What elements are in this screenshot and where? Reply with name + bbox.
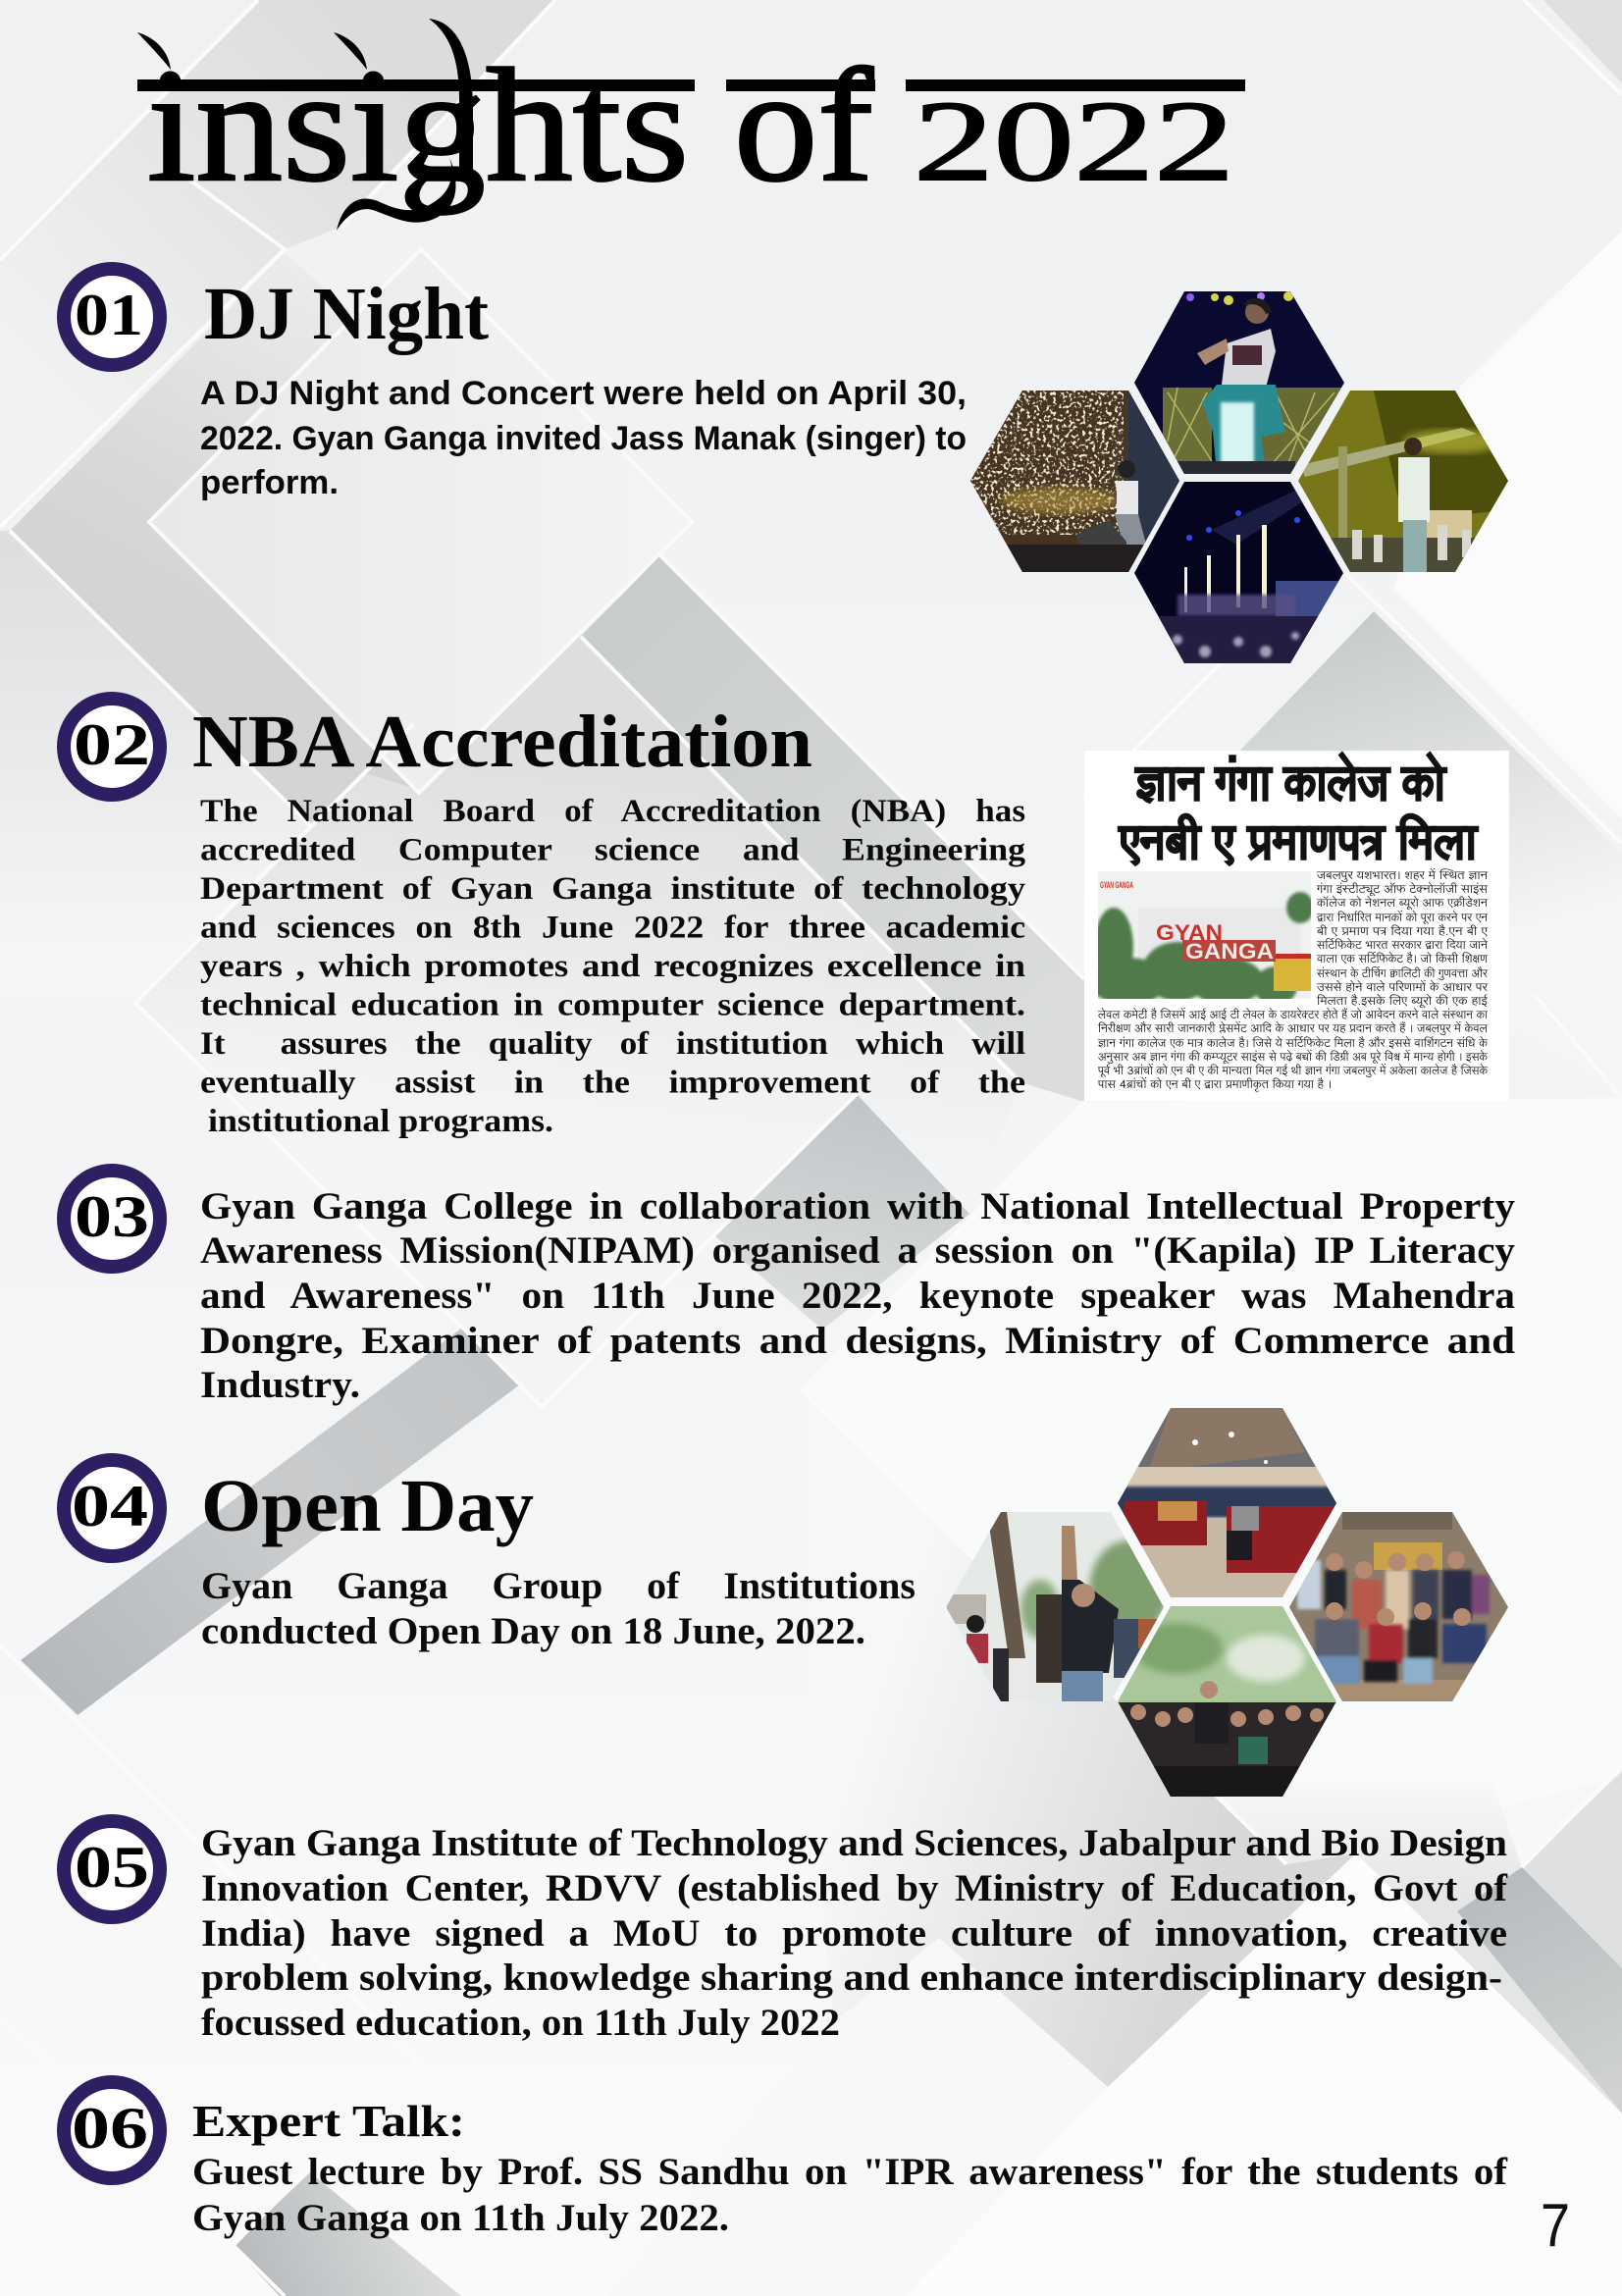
newspaper body text: जबलपुर यशभारत। शहर में स्थित ज्ञान (1316, 866, 1488, 885)
badge 02: 02 (74, 712, 150, 777)
title: of (734, 35, 873, 215)
newspaper photo: campus building: GYAN GANGA (1100, 880, 1133, 890)
badge 03: 03 (75, 1184, 149, 1249)
newspaper body text: संस्थान के टीचिंग क्वालिटी की गुणवत्ता और (1316, 965, 1489, 983)
text block: IP literacy description (200, 1185, 1516, 1406)
newspaper body text: पास 4ब्रांचों को एन बी ए द्वारा प्रमाणीकृत किया गया है । (1097, 1075, 1332, 1094)
text block: DJ Night description: perform. (200, 464, 339, 501)
badge 03 (64, 1171, 160, 1267)
newspaper body text: सर्टिफिकेट भारत सरकार द्वारा दिया जाने (1316, 936, 1488, 955)
text block: IP literacy description: Industry. (200, 1364, 360, 1406)
newspaper headline: एनबी ए प्रमाणपत्र मिला (1118, 808, 1478, 883)
newspaper body text: मिलता है.इसके लिए ब्यूरो की एक हाई (1316, 992, 1488, 1011)
newspaper body text: बी ए प्रमाण पत्र दिया गया है.एन बी ए (1316, 922, 1489, 941)
text block: MoU description: problem solving, knowledge sharing and enhance interdisciplinary design- (201, 1957, 1502, 1999)
newspaper body text: पूर्व भी 3ब्रांचों को एन बी ए की मान्यता मिल गई थी ज्ञान गंगा जबलपुर में अकेला कालेज है जिसके (1097, 1062, 1489, 1080)
hexagon photo: singer on stage (1134, 291, 1344, 474)
text block: NBA description (200, 794, 1026, 1139)
hexagon photo: speaker in crowd under trees (1114, 1603, 1339, 1800)
hexagon photo: confetti (967, 388, 1182, 574)
section 06: Expert Talk (64, 2082, 1508, 2239)
heading: NBA Accreditation: NBA Accreditation (192, 701, 812, 783)
badge 01: 01 (75, 283, 143, 347)
newspaper photo: campus building: GYAN (1156, 920, 1223, 945)
heading: DJ Night: DJ Night (204, 273, 489, 355)
heading: Expert Talk: Expert Talk: (192, 2096, 465, 2146)
text block: MoU description: Innovation Center, RDVV (established by Ministry of Education, Govt of (201, 1867, 1508, 1909)
hexagon photo: students cheering (942, 1509, 1168, 1705)
badge 05: 05 (75, 1835, 149, 1900)
text block: MoU description (201, 1822, 1508, 2044)
text block: Open Day description: conducted Open Day on 18 June, 2022. (201, 1610, 865, 1652)
title: insights (147, 35, 689, 215)
text block: IP literacy description: Dongre, Examiner of patents and designs, Ministry of Commerce and (200, 1320, 1515, 1362)
text block: NBA description: Department of Gyan Ganga institute of technology (200, 871, 1026, 907)
text block: DJ Night description: 2022. Gyan Ganga invited Jass Manak (singer) to (200, 420, 967, 457)
text block: Open Day description: Gyan Ganga Group of Institutions (201, 1565, 916, 1607)
text block: NBA description: and sciences on 8th June 2022 for three academic (200, 911, 1025, 946)
text block: NBA description: technical education in computer science department. (200, 987, 1025, 1022)
text block: IP literacy description: Gyan Ganga College in collaboration with National Intellectual Property (200, 1185, 1516, 1227)
newspaper body text: कॉलेज को नेशनल ब्यूरो आफ एक्रीडेशन (1316, 894, 1488, 913)
heading: Open Day: Open Day (201, 1465, 534, 1547)
hexagon photo: group of students (1285, 1509, 1511, 1705)
newspaper body text: ज्ञान गंगा कालेज एक मात्र कालेज है। जिसे ये सर्टिफिकेट मिला है और इससे वाशिंगटन संधि के (1097, 1034, 1489, 1053)
text block: MoU description: focussed education, on 11th July 2022 (201, 2002, 840, 2044)
badge 04: 04 (72, 1474, 148, 1539)
text block: NBA description: institutional programs. (208, 1104, 553, 1139)
text block: DJ Night description: A DJ Night and Concert were held on April 30, (200, 375, 967, 412)
text block: MoU description: Gyan Ganga Institute of Technology and Sciences, Jabalpur and Bio Design (201, 1822, 1507, 1864)
newspaper clipping (1084, 749, 1509, 1101)
text block: IP literacy description: Awareness Mission(NIPAM) organised a session on "(Kapila) IP Literacy (200, 1229, 1516, 1272)
hexagon photo: fireworks on stage (1128, 479, 1349, 667)
text block: MoU description: India) have signed a MoU to promote culture of innovation, creative (201, 1912, 1507, 1955)
hexagon photo: auditorium audience (1114, 1403, 1339, 1601)
text block: IP literacy description: and Awareness" on 11th June 2022, keynote speaker was Mahendra (200, 1275, 1515, 1317)
badge 06 (64, 2082, 160, 2178)
section 02: NBA Accreditation (64, 699, 1509, 1139)
badge 02 (64, 699, 160, 795)
page number: 7 (1541, 2192, 1570, 2260)
text block: NBA description: years , which promotes and recognizes excellence in (200, 949, 1025, 984)
text block: Expert Talk description: Guest lecture by Prof. SS Sandhu on "IPR awareness" for the students of (192, 2151, 1508, 2193)
title (137, 19, 1245, 231)
badge 04 (64, 1460, 160, 1556)
text block: NBA description: accredited Computer science and Engineering (200, 832, 1026, 867)
text block: NBA description: It assures the quality of institution which will (200, 1026, 1025, 1062)
section 03: IP literacy session (64, 1171, 1516, 1406)
text block: Open Day description (201, 1565, 916, 1652)
photo collage: Open Day hexagons (942, 1403, 1511, 1800)
section 05: MoU signing (64, 1821, 1508, 2044)
newspaper photo: campus building (1098, 871, 1311, 999)
newspaper body text (1097, 866, 1489, 1094)
newspaper body text: निरीक्षण और सारी जानकारी प्लेसमेंट आदि के आधार पर यह प्रदान करते हैं । जबलपुर में केवल (1097, 1019, 1489, 1038)
newspaper headline (1118, 749, 1478, 883)
newspaper body text: गंगा इंस्टीट्यूट ऑफ टेक्नोलॉजी साइंस (1316, 880, 1489, 899)
newspaper body text: उससे होने वाले परिणामों के आधार पर (1316, 978, 1489, 997)
photo collage: DJ night hexagons (967, 285, 1511, 667)
text block: Expert Talk description (192, 2151, 1508, 2239)
text block: NBA description: The National Board of Accreditation (NBA) has (200, 794, 1025, 829)
newspaper photo: campus building: GANGA (1185, 939, 1274, 964)
hexagon photo: yellow stage lights (1295, 388, 1511, 575)
text block: DJ Night description (200, 375, 967, 501)
badge 06: 06 (72, 2096, 148, 2161)
title: 2022 (914, 78, 1234, 205)
newspaper body text: द्वारा निर्धारित मानकों को पूरा करने पर एन (1316, 909, 1488, 927)
section 04: Open Day (64, 1403, 1511, 1800)
newspaper body text: लेवल कमेटी है जिसमें आई आई टी लेवल के डायरेक्टर होते हैं जो आवेदन करने वाले संस्थान का (1097, 1006, 1489, 1024)
text block: Expert Talk description: Gyan Ganga on 11th July 2022. (192, 2197, 729, 2239)
newspaper body text: अनुसार अब ज्ञान गंगा की कम्प्यूटर साइंस से पढ़े बच्चों की डिग्री अब पूरे विश्व में मान्य होगी । इसके (1098, 1048, 1489, 1067)
newspaper headline: ज्ञान गंगा कालेज को (1134, 749, 1446, 824)
badge 05 (64, 1821, 160, 1917)
section 01: DJ Night (64, 269, 1511, 667)
newspaper body text: वाला एक सर्टिफिकेट है। जो किसी शिक्षण (1316, 950, 1488, 968)
badge 01 (64, 269, 160, 365)
text block: NBA description: eventually assist in the improvement of the (200, 1066, 1025, 1101)
